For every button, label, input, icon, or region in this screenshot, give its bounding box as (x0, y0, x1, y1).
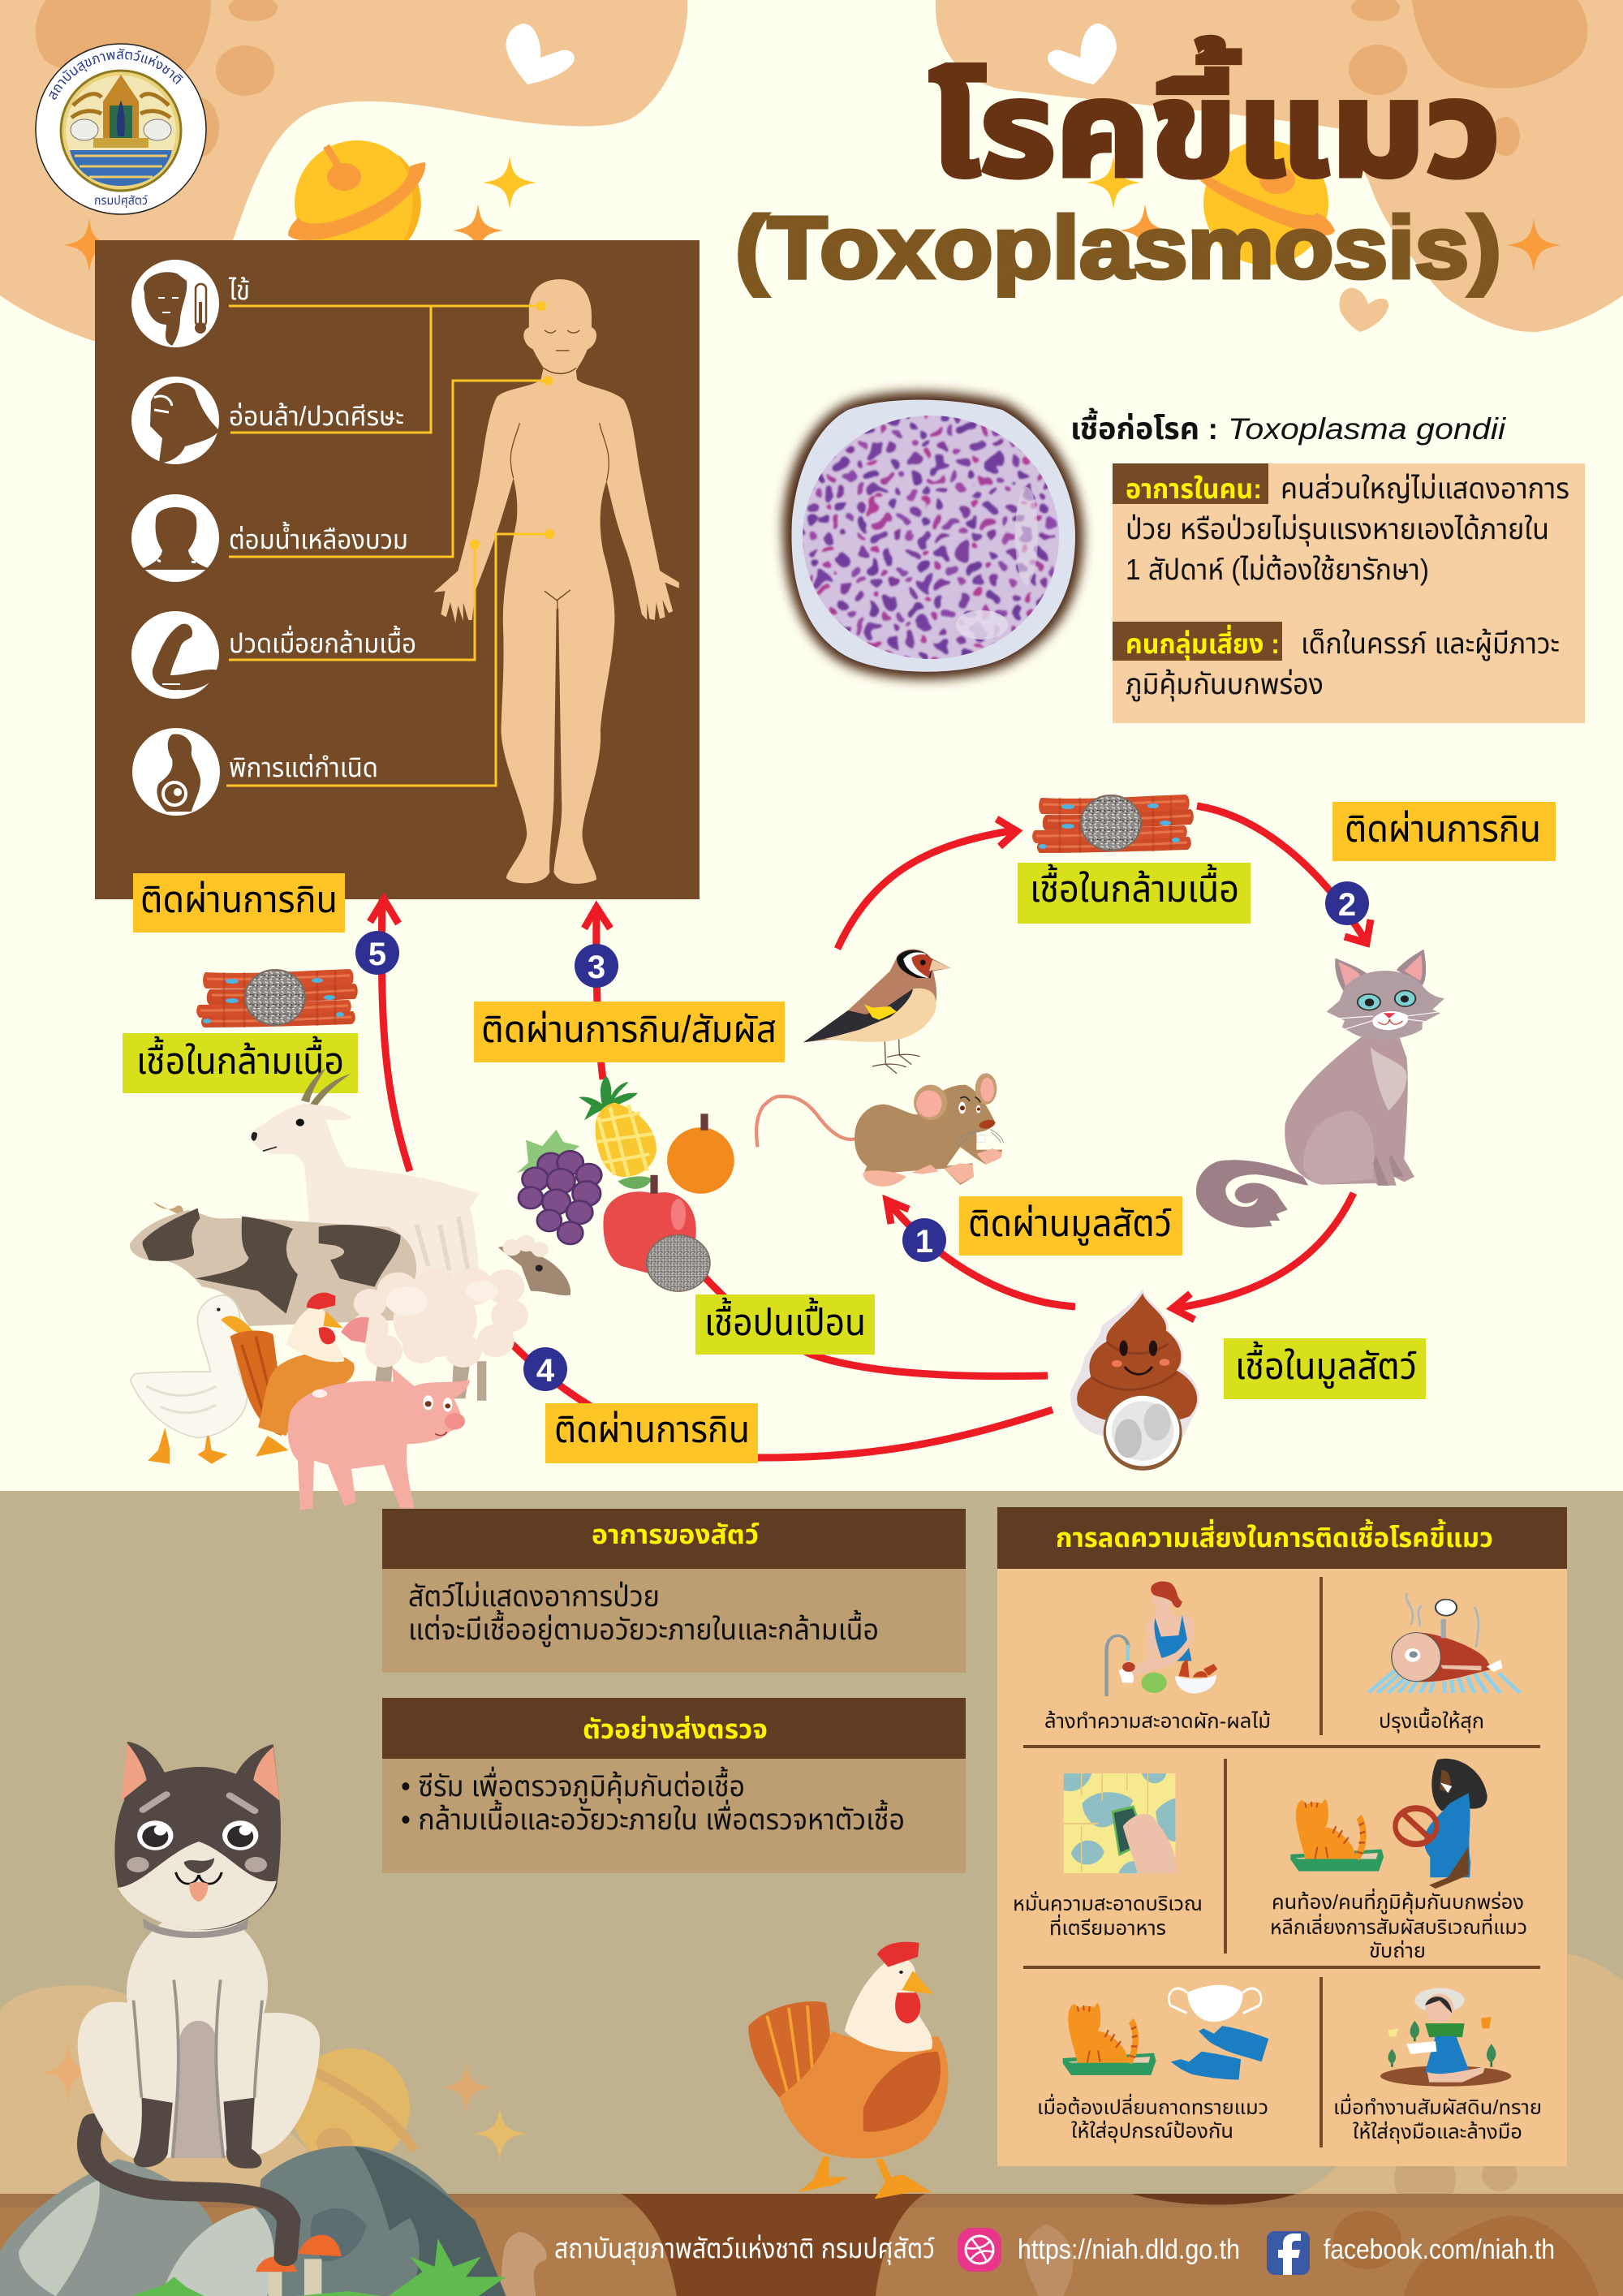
panel: human symptoms and risk groups: คนกลุ่มเสี่ยง : (1126, 624, 1280, 661)
label: contaminated pathogen: เชื้อปนเปื้อน (704, 1297, 866, 1343)
pointer lines (226, 301, 554, 786)
grapes (517, 1130, 601, 1244)
arrow: muscle to cat (1197, 806, 1371, 943)
label: contaminated pathogen (695, 1294, 875, 1355)
icon: muscle tissue top (1032, 795, 1194, 853)
panel: specimens: ตัวอย่างส่งตรวจ (583, 1714, 768, 1744)
captions: ล้างทำความสะอาดผัก-ผลไม้ (1044, 1710, 1271, 1733)
badge 3 (575, 944, 618, 988)
label: pathogen in faeces (1224, 1338, 1426, 1399)
label: transmitted by eating or contact: ติดผ่านการกิน/สัมผัส (481, 1008, 777, 1050)
arrow: bird and rodent to muscle (837, 819, 1017, 949)
badge 5: 5 (368, 937, 386, 972)
label: transmitted by faeces: ติดผ่านมูลสัตว์ (968, 1202, 1172, 1246)
arrow: livestock to human (370, 899, 410, 1171)
apple (603, 1175, 696, 1278)
panel: risk reduction (997, 1507, 1567, 2166)
badge 5 (355, 931, 399, 975)
icon: dribbble (958, 2228, 1001, 2272)
illustration: fruits (517, 1075, 734, 1291)
title: Thai: โรคขี้แมว (929, 37, 1500, 204)
badge 3: 3 (588, 950, 605, 985)
orange (667, 1114, 734, 1194)
title: English: (Toxoplasmosis) (735, 198, 1501, 296)
human body figure (433, 279, 679, 884)
symptom labels (228, 275, 416, 782)
label: transmitted by eating, upper left: ติดผ่านการกิน (140, 878, 338, 920)
illustration: masked cat sitting on rock (78, 1742, 320, 2256)
panel: human symptoms (95, 240, 700, 899)
background: top-left blob (0, 0, 687, 341)
illustration: cat (1196, 950, 1444, 1228)
panel: specimens: • ซีรัม เพื่อตรวจภูมิคุ้มกันต่อเชื้อ (401, 1766, 745, 1803)
label: pathogen in muscle, top (1018, 863, 1251, 924)
badge 1 (902, 1218, 946, 1262)
captions: เมื่อต้องเปลี่ยนถาดทรายแมว (1037, 2093, 1268, 2119)
logo: National Institute of Animal Health seal: สถาบันสุขภาพสัตว์แห่งชาติ (49, 49, 183, 100)
captions: ให้ใส่ถุงมือและล้างมือ (1353, 2121, 1522, 2144)
icon: gardening (1380, 1988, 1511, 2087)
chicken (230, 1293, 355, 1457)
captions: ให้ใส่อุปกรณ์ป้องกัน (1071, 2120, 1233, 2143)
background: top-right blob (936, 0, 1623, 332)
panel: specimens (382, 1698, 966, 1873)
icon: facebook (1267, 2231, 1310, 2275)
badge 2 (1325, 881, 1369, 925)
label: pathogen in muscle, left: เชื้อในกล้ามเนื้อ (136, 1036, 344, 1082)
transmission cycle arrows (370, 806, 1371, 1458)
symptom labels: ปวดเมื่อยกล้ามเนื้อ (229, 625, 416, 658)
sheep (341, 1235, 570, 1401)
label: pathogen in muscle, left (123, 1033, 358, 1093)
icon: cooking meat (1369, 1593, 1520, 1693)
captions: ขับถ่าย (1369, 1940, 1426, 1962)
arrow: fruit to human (584, 907, 610, 1079)
duck (130, 1295, 257, 1464)
badge 4: 4 (536, 1353, 555, 1389)
footer: facebook page: facebook.com/niah.th (1324, 2234, 1555, 2265)
icon: cleaning surface (1064, 1773, 1177, 1873)
label: transmitted by eating, bottom (545, 1403, 758, 1463)
captions: ที่เตรียมอาหาร (1049, 1914, 1166, 1940)
panel: human symptoms and risk groups: ป่วย หรือป่วยไม่รุนแรงหายเองได้ภายใน (1126, 512, 1549, 546)
logo: National Institute of Animal Health seal (35, 43, 207, 215)
panel: human symptoms and risk groups: 1 สัปดาห์ (ไม่ต้องใช้ยารักษา) (1126, 553, 1429, 586)
arrow: faeces to livestock (503, 1335, 1053, 1458)
symptom labels: พิการแต่กำเนิด (229, 752, 378, 782)
illustration: goldfinch bird (803, 950, 951, 1074)
captions: เมื่อทำงานสัมผัสดิน/ทราย (1333, 2093, 1542, 2119)
pig (288, 1368, 470, 1510)
arrow: cat to faeces (1173, 1193, 1354, 1320)
panel: animal symptoms: อาการของสัตว์ (592, 1519, 760, 1549)
arrow: faeces to contaminated fruit (702, 1274, 1048, 1376)
footer: organisation name: สถาบันสุขภาพสัตว์แห่งชาติ กรมปศุสัตว์ (554, 2234, 935, 2265)
captions: หลีกเลี่ยงการสัมผัสบริเวณที่แมว (1270, 1913, 1527, 1939)
panel: human symptoms and risk groups: เด็กในครรภ์ และผู้มีภาวะ (1301, 627, 1560, 661)
number badges (355, 881, 1369, 1391)
icon: tan heart (1339, 288, 1388, 332)
panel: animal symptoms (382, 1509, 966, 1673)
goat (252, 1068, 480, 1282)
label: transmitted by eating or contact (474, 1002, 785, 1062)
bottom band (0, 2194, 1623, 2296)
illustration: rocks and mushrooms (0, 2146, 506, 2296)
panel: animal symptoms: สัตว์ไม่แสดงอาการป่วย (408, 1579, 660, 1613)
panel: human symptoms and risk groups (1113, 463, 1585, 723)
icon: white heart right (1048, 24, 1117, 84)
icon: swollen lymph nodes (131, 494, 219, 582)
icon: cat litter and pregnant woman (1290, 1759, 1487, 1889)
captions: ปรุงเนื้อให้สุก (1379, 1707, 1484, 1734)
illustration: livestock group (130, 1068, 570, 1510)
captions (1013, 1707, 1542, 2144)
panel: human symptoms and risk groups: อาการในคน: (1126, 474, 1262, 505)
icon: muscle pain (131, 611, 219, 699)
icon: bell planet left (288, 140, 425, 265)
pathogen heading: Toxoplasma gondii (1228, 412, 1507, 446)
icon: birth defects (132, 728, 220, 816)
panel: human symptoms and risk groups: ภูมิคุ้มกันบกพร่อง (1126, 667, 1324, 701)
pathogen heading (1070, 407, 1507, 446)
label: pathogen in muscle, top: เชื้อในกล้ามเนื้อ (1030, 864, 1239, 910)
badge 1: 1 (915, 1224, 933, 1260)
icon: litter tray and protective gear (1063, 1985, 1268, 2079)
label: transmitted by eating, upper left (133, 873, 345, 933)
icon: bell planet right (1199, 140, 1335, 265)
contaminant disc (647, 1235, 710, 1291)
illustration: rodent (756, 1073, 1004, 1187)
footer: website: https://niah.dld.go.th (1018, 2234, 1240, 2265)
panel: specimens: • กล้ามเนื้อและอวัยวะภายใน เพื่อตรวจหาตัวเชื้อ (401, 1799, 905, 1836)
lower sparkles and bell (44, 2041, 527, 2167)
icon: fever (131, 260, 219, 347)
arrow: faeces to rodent (887, 1200, 1075, 1307)
panel: animal symptoms: แต่จะมีเชื้ออยู่ตามอวัยวะภายในและกล้ามเนื้อ (408, 1609, 879, 1647)
label: transmitted by eating, top right: ติดผ่านการกิน (1345, 808, 1541, 850)
lower section background (0, 1491, 1623, 2296)
symptom labels: อ่อนล้า/ปวดศีรษะ (229, 401, 404, 431)
label: transmitted by eating, top right (1332, 802, 1556, 861)
illustration: faeces with oocyst (1070, 1289, 1199, 1471)
panel: human symptoms and risk groups: คนส่วนใหญ่ไม่แสดงอาการ (1281, 472, 1569, 505)
label: pathogen in faeces: เชื้อในมูลสัตว์ (1235, 1341, 1417, 1389)
label: transmitted by faeces (959, 1196, 1182, 1256)
icon: muscle tissue left (196, 969, 358, 1027)
pineapple (579, 1075, 657, 1177)
logo: National Institute of Animal Health seal: กรมปศุสัตว์ (94, 194, 148, 208)
symptom labels: ต่อมน้ำเหลืองบวม (229, 521, 408, 554)
icon: washing vegetables (1107, 1582, 1217, 1696)
captions: คนท้อง/คนที่ภูมิคุ้มกันบกพร่อง (1272, 1888, 1524, 1915)
illustration: hen (748, 1942, 948, 2199)
panel: risk reduction: การลดความเสี่ยงในการติดเชื้อโรคขี้แมว (1056, 1518, 1493, 1553)
image: Toxoplasma cyst micrograph (783, 392, 1083, 682)
icon: headache (131, 377, 219, 464)
label: transmitted by eating, bottom: ติดผ่านการกิน (554, 1408, 750, 1450)
icon: white heart left (506, 24, 575, 84)
sparkles (63, 156, 1561, 272)
captions: หมั่นความสะอาดบริเวณ (1013, 1890, 1203, 1915)
badge 4 (523, 1347, 567, 1391)
cow (130, 1202, 416, 1326)
symptom labels: ไข้ (228, 275, 250, 305)
pathogen heading: เชื้อก่อโรค : (1070, 407, 1218, 446)
badge 2: 2 (1338, 887, 1356, 923)
